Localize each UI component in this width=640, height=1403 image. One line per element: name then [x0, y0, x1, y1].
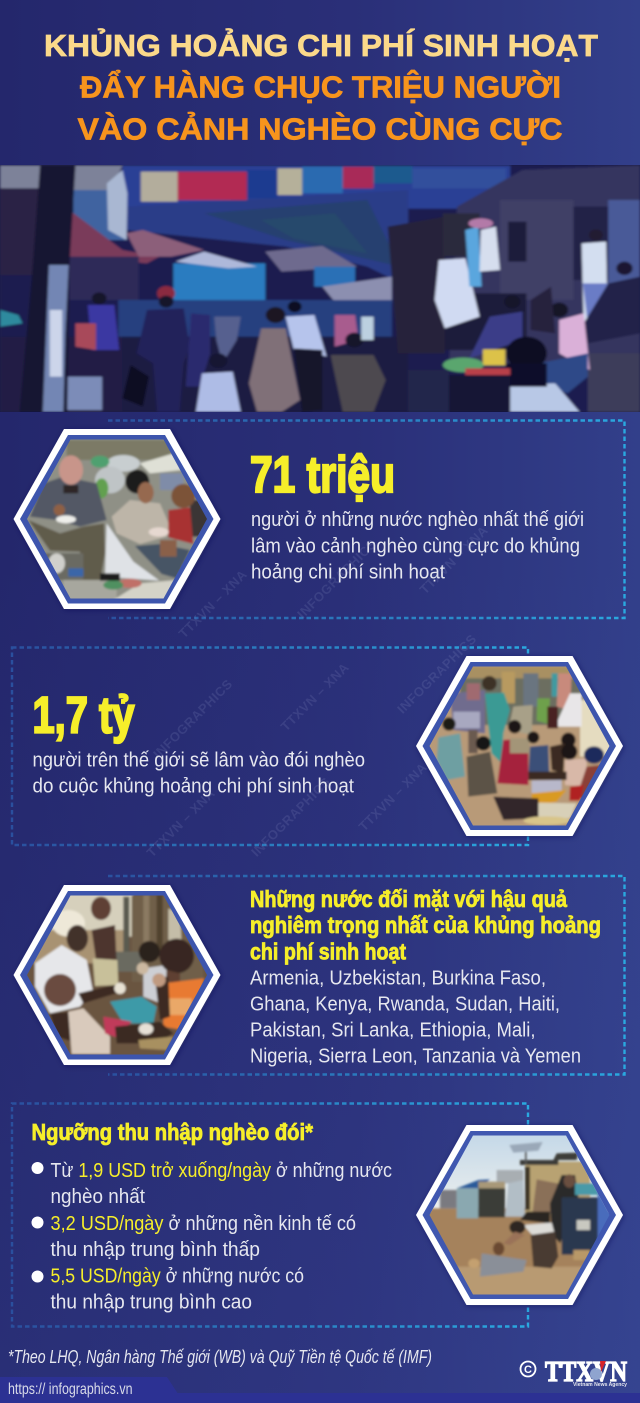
- bullet list: thu nhập trung bình thấp: [50, 1239, 260, 1261]
- heading: Ngưỡng thu nhập nghèo đói*: [32, 1119, 313, 1145]
- photo hexagon: mother and children eating: [14, 885, 220, 1065]
- title: KHỦNG HOẢNG CHI PHÍ SINH HOẠT: [44, 27, 598, 63]
- panel: poverty income thresholds: [12, 1104, 623, 1326]
- website url: https:// infographics.vn: [8, 1381, 132, 1398]
- description: [251, 509, 584, 584]
- description: lâm vào cảnh nghèo cùng cực do khủng: [251, 536, 580, 558]
- description: người ở những nước nghèo nhất thế giới: [251, 509, 584, 531]
- country list: Pakistan, Sri Lanka, Ethiopia, Mali,: [250, 1020, 536, 1042]
- logo: TTXVN: [520, 1357, 628, 1388]
- title: ĐẨY HÀNG CHỤC TRIỆU NGƯỜI: [80, 68, 561, 104]
- people: [137, 308, 190, 412]
- watermarks: TTXVN – XNA: [176, 567, 250, 641]
- bullet list: [32, 1160, 392, 1314]
- panel: 1,7 tỷ: [12, 648, 623, 845]
- bullet list: 3,2 USD/ngày ở những nền kinh tế có: [50, 1213, 356, 1235]
- watermarks: TTXVN – XNA: [356, 760, 430, 834]
- photo hexagon: refugee camp: [416, 1125, 623, 1305]
- title: [44, 27, 598, 146]
- title: VÀO CẢNH NGHÈO CÙNG CỰC: [78, 110, 562, 146]
- country list: Armenia, Uzbekistan, Burkina Faso,: [250, 968, 546, 990]
- country list: Nigeria, Sierra Leon, Tanzania và Yemen: [250, 1046, 581, 1068]
- description: người trên thế giới sẽ lâm vào đói nghèo: [32, 750, 365, 772]
- dashed frame: [108, 420, 624, 618]
- logo: TTXVN: C: [524, 1364, 532, 1376]
- watermarks: TTXVN – XNA: [278, 660, 352, 734]
- country list: [250, 968, 581, 1068]
- watermarks: INFOGRAPHICS: [150, 676, 235, 761]
- heading: Những nước đối mặt với hậu quả: [250, 886, 567, 912]
- tree trunk: [20, 165, 76, 412]
- source note: *Theo LHQ, Ngân hàng Thế giới (WB) và Quỹ Tiền tệ Quốc tế (IMF): [8, 1347, 432, 1367]
- heading: [250, 886, 601, 964]
- watermarks: INFOGRAPHICS: [294, 536, 379, 621]
- bullet list: 5,5 USD/ngày ở những nước có: [50, 1266, 304, 1288]
- right building: [449, 165, 640, 367]
- dashed frame: [108, 876, 624, 1074]
- footer band: [0, 1377, 640, 1403]
- watermarks: INFOGRAPHICS: [248, 774, 333, 859]
- hero photo: crowded slum street: [0, 165, 640, 412]
- dashed frame: [12, 648, 528, 845]
- bullet list: Từ 1,9 USD trở xuống/ngày ở những nước: [50, 1160, 392, 1182]
- heading: chi phí sinh hoạt: [250, 938, 406, 964]
- panel: worst affected countries: [14, 876, 624, 1074]
- dashed frame: [12, 1104, 528, 1326]
- stat: 71 triệu: 71 triệu: [250, 446, 395, 503]
- bullet list: thu nhập trung bình cao: [50, 1292, 252, 1314]
- logo: TTXVN: Vietnam News Agency: [573, 1382, 628, 1388]
- watermarks: INFOGRAPHICS: [394, 631, 479, 716]
- watermarks: TTXVN – XNA: [144, 786, 218, 860]
- photo hexagon: crowd seated on sand: [416, 656, 623, 836]
- heading: nghiêm trọng nhất của khủng hoảng: [250, 912, 601, 938]
- description: do cuộc khủng hoảng chi phí sinh hoạt: [32, 776, 354, 798]
- hanging clothes: [435, 258, 480, 328]
- right seated people: [582, 242, 607, 323]
- watermarks: [144, 523, 491, 860]
- description: hoảng chi phí sinh hoạt: [251, 562, 445, 584]
- photo hexagon: family on garbage dump: [14, 429, 220, 609]
- stat: 1,7 tỷ: 1,7 tỷ: [32, 686, 135, 744]
- bullet list: nghèo nhất: [50, 1186, 145, 1208]
- description: [32, 750, 365, 798]
- country list: Ghana, Kenya, Rwanda, Sudan, Haiti,: [250, 994, 560, 1016]
- watermarks: TTXVN – XNA: [417, 523, 491, 597]
- panel: 71 triệu: [14, 420, 624, 618]
